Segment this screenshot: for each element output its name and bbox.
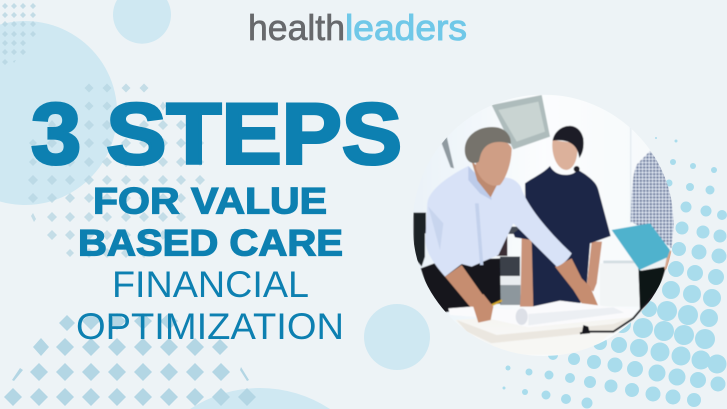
man: trousers (421, 258, 501, 313)
folder (612, 223, 670, 271)
logo word: leaders: leaders (345, 7, 467, 48)
table (462, 318, 627, 331)
person right: checked shirt (631, 151, 674, 248)
subtitle line: OPTIMIZATION: OPTIMIZATION (76, 305, 344, 347)
logo word: health: health (248, 7, 345, 48)
person right: hand (663, 250, 672, 270)
man: hand over plans (472, 294, 493, 323)
decorative circle: lower centre (364, 304, 430, 370)
man: neck and head (472, 162, 499, 197)
photo backdrop (413, 95, 674, 356)
diamond pattern: centre left (28, 84, 205, 258)
diamond pattern: bottom left (4, 313, 256, 406)
subtitle line: BASED CARE: BASED CARE (78, 222, 343, 264)
man: shirt (425, 166, 572, 277)
woman: dress (513, 166, 611, 307)
cable (580, 285, 662, 333)
subtitle line: FINANCIAL: FINANCIAL (112, 263, 309, 305)
wall picture (492, 95, 550, 149)
decorative circle: top left large (0, 21, 117, 205)
woman: face and hair (552, 140, 578, 170)
diamond pattern: top left (2, 3, 36, 65)
man: left forearm (444, 264, 483, 308)
photo: colleagues reviewing plans at a table (413, 95, 674, 356)
subtitle line: FOR VALUE: FOR VALUE (93, 180, 327, 222)
blueprints (448, 301, 637, 327)
man: pencil (491, 299, 503, 306)
title: 3 STEPS: 3 STEPS (31, 86, 402, 182)
decorative circle: top small (113, 0, 171, 44)
office background (413, 213, 426, 267)
man: right forearm and hand (554, 258, 598, 306)
logo: healthleaders (248, 7, 467, 48)
person right: trousers (638, 265, 667, 312)
halftone dots: bottom right (502, 137, 727, 408)
woman: arms (520, 237, 536, 307)
decorative circle: bottom (190, 388, 330, 409)
